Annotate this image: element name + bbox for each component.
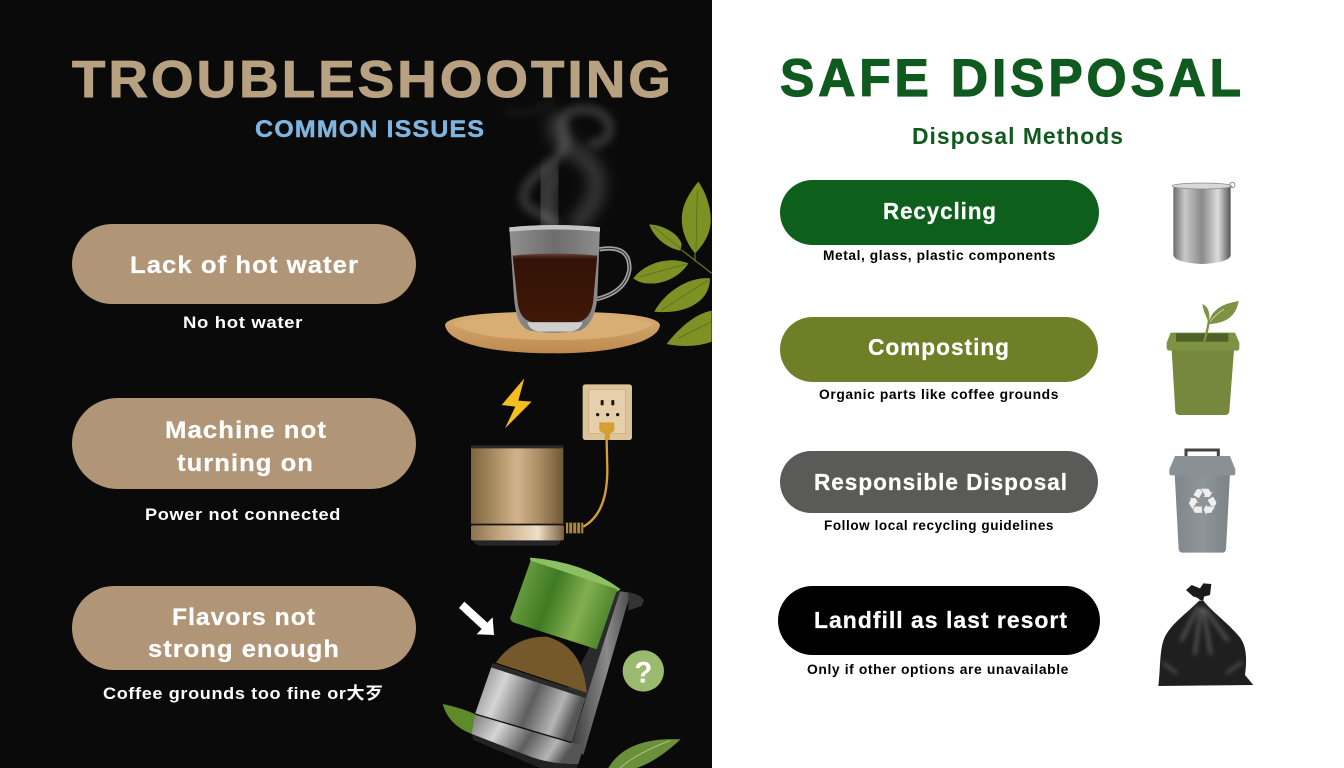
icon: metal can: [1172, 182, 1235, 264]
method: composting: [780, 317, 1098, 402]
wall outlet: [583, 384, 632, 440]
icon: compost bin with sprout: [1167, 301, 1239, 415]
subtitle: common issues: COMMON ISSUES: [255, 116, 485, 143]
white arrow: [459, 602, 494, 635]
issue: machine not turning on: Power not connected: [145, 505, 341, 524]
base: [472, 714, 584, 764]
plug and cord: [599, 422, 614, 440]
lightning bolt: [502, 378, 532, 428]
glass base: [527, 322, 583, 332]
method: landfill: [778, 586, 1100, 677]
issue: machine not turning on: [72, 398, 416, 524]
method: landfill: Landfill as last resort: [814, 607, 1068, 633]
method: recycling: [780, 180, 1099, 263]
bottom leaves: [443, 704, 477, 734]
silver cup: [475, 663, 587, 743]
icon: black garbage bag: [1158, 583, 1253, 686]
issue: flavors not strong enough: Coffee grounds too fine or大歹: [103, 684, 384, 703]
method: composting: Organic parts like coffee grounds: [819, 386, 1059, 402]
silver back column: [572, 592, 631, 755]
icon: grey recycling bin: [1169, 450, 1235, 553]
illustration: tilted grinder with green lid: [443, 558, 681, 768]
issue: lack of hot water: [72, 224, 416, 332]
method: recycling: Metal, glass, plastic components: [823, 247, 1056, 263]
issue: lack of hot water: Lack of hot water: [130, 252, 359, 279]
subtitle: disposal methods: Disposal Methods: [912, 123, 1124, 149]
cup handle: [595, 248, 629, 299]
issue: machine not turning on: turning on: [177, 450, 314, 477]
method: landfill: Only if other options are unavailable: [807, 661, 1069, 677]
glass cup: [509, 225, 600, 333]
question badge: [623, 650, 664, 692]
illustration: power outlet and bronze machine: [471, 378, 632, 546]
title: safe disposal: SAFE DISPOSAL: [780, 49, 1245, 108]
issue: machine not turning on: Machine not: [165, 417, 327, 444]
issue: lack of hot water: No hot water: [183, 313, 303, 332]
steam: [507, 100, 610, 223]
issue: flavors not strong enough: Flavors not: [172, 604, 316, 631]
method: responsible disposal: Responsible Disposal: [814, 469, 1068, 495]
title: troubleshooting: TROUBLESHOOTING: [72, 51, 674, 109]
panel: troubleshooting background: [0, 0, 712, 768]
leaves: [633, 182, 712, 346]
panel: safe disposal background: [712, 0, 1344, 768]
method: responsible disposal: Follow local recycling guidelines: [824, 517, 1054, 533]
method: composting: Composting: [868, 334, 1010, 360]
issue: flavors not strong enough: strong enough: [148, 636, 340, 663]
illustration: tilted grinder with green lid: ?: [634, 657, 652, 690]
method: recycling: Recycling: [883, 198, 997, 224]
illustration: steaming coffee cup on wooden tray with leaves: [445, 100, 712, 353]
method: responsible disposal: [780, 451, 1098, 533]
issue: flavors not strong enough: [72, 586, 416, 703]
wooden tray: [445, 312, 660, 353]
coffee: [513, 253, 597, 322]
bronze cylinder: [473, 538, 561, 546]
icon: grey recycling bin: ♻: [1186, 480, 1219, 524]
coffee grounds: [496, 637, 587, 693]
green lid: [530, 558, 621, 592]
dark inner panel: [567, 590, 630, 703]
